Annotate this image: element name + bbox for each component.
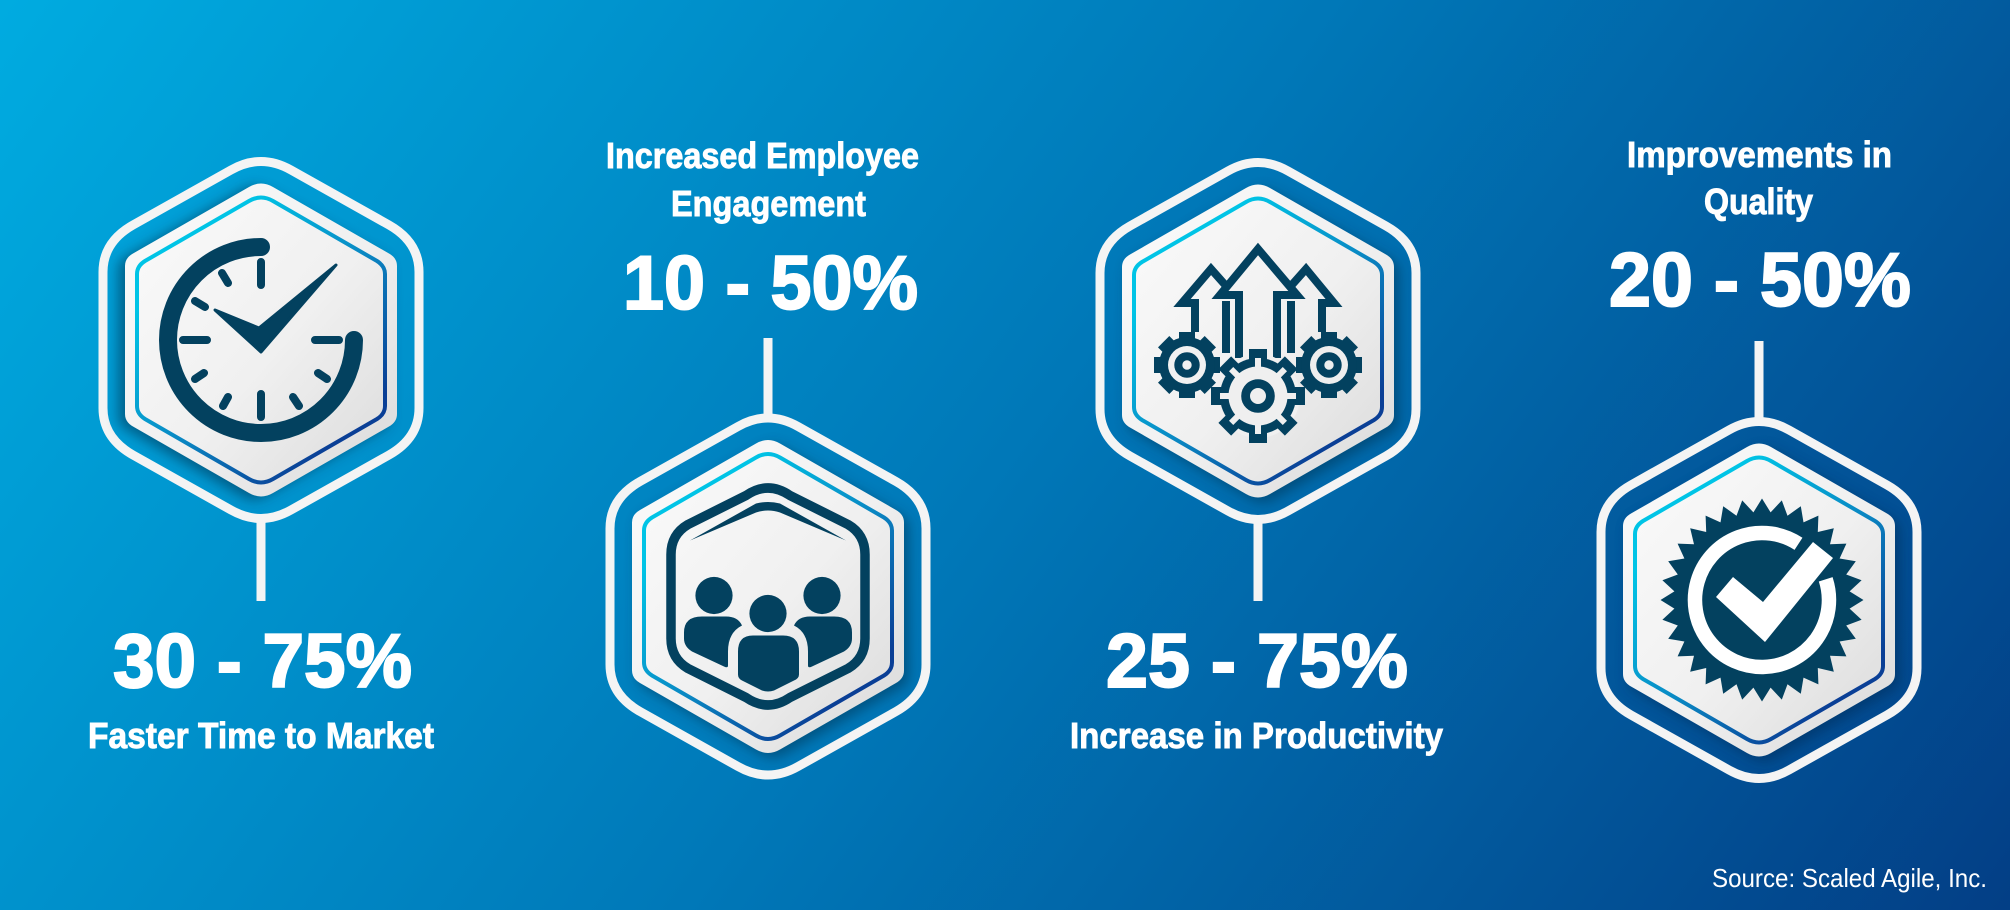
- hexagon badge: people: [610, 418, 926, 775]
- label: increased employee engagement: [606, 135, 919, 224]
- icon: clock: [168, 247, 354, 433]
- connector line: [1254, 520, 1262, 601]
- hexagon badge: clock: [103, 162, 419, 518]
- hexagon badge: gears: [1100, 162, 1416, 520]
- label: increased employee engagement: Increased Employee: [606, 135, 919, 176]
- connector line: [764, 338, 772, 418]
- stat: 30 - 75%: 30 - 75%: [113, 619, 412, 704]
- hexagon badge: quality seal: [1601, 422, 1917, 778]
- label: faster time to market: Faster Time to Market: [88, 715, 434, 756]
- panel: increase in productivity: [1070, 162, 1443, 756]
- label: increased employee engagement: Engagement: [671, 183, 866, 224]
- stat: 20 - 50%: 20 - 50%: [1609, 238, 1911, 323]
- label: improvements in quality: Improvements in: [1627, 134, 1892, 175]
- panel: increased employee engagement: [606, 135, 926, 775]
- stat: 25 - 75%: 25 - 75%: [1106, 619, 1408, 704]
- stat: 10 - 50%: 10 - 50%: [623, 241, 918, 326]
- icon: team of three people: [671, 488, 865, 705]
- label: improvements in quality: Quality: [1704, 181, 1813, 222]
- connector line: [1754, 341, 1764, 421]
- icon: arrows and gears: [1154, 249, 1362, 443]
- connector line: [256, 520, 266, 601]
- icon: seal with check mark: [1660, 498, 1864, 702]
- source note: Source: Scaled Agile, Inc.: [1712, 863, 1987, 893]
- label: improvements in quality: [1627, 134, 1892, 222]
- panel: improvements in quality: [1601, 134, 1917, 778]
- label: increase in productivity: Increase in Productivity: [1070, 715, 1443, 756]
- panel: faster time to market: [88, 162, 434, 756]
